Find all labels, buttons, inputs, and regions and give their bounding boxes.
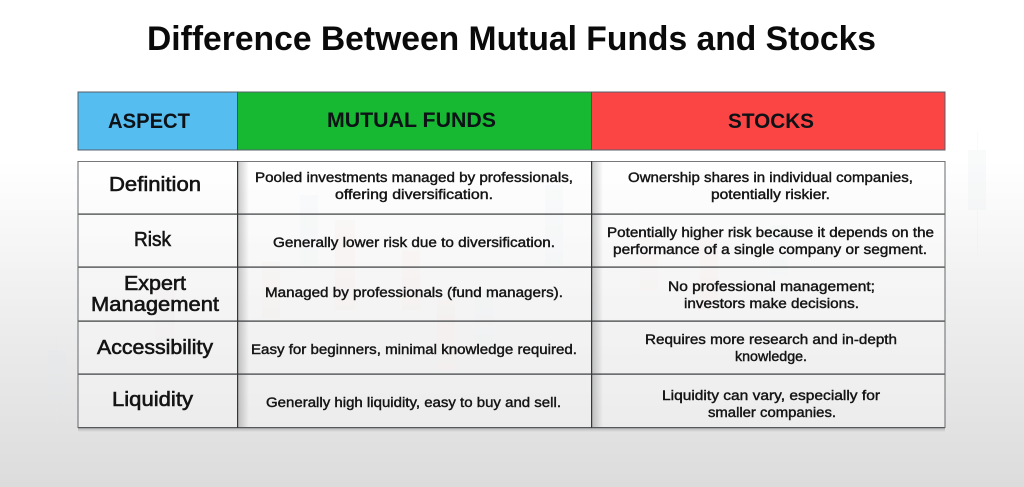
faint candlestick chart backdrop [48,132,986,425]
row: expert management: Expert [124,272,186,295]
row: expert management: Managed by professionals (fund managers). [265,285,563,301]
row: expert management: No professional management; [668,279,875,295]
row: risk: Risk [134,228,172,251]
row: accessibility: knowledge. [735,349,807,365]
row: accessibility [97,332,897,365]
row: expert management [91,272,875,316]
row: accessibility: Easy for beginners, minimal knowledge required. [251,342,577,358]
title: Difference Between Mutual Funds and Stocks [147,20,876,58]
header cell: mutual funds: MUTUAL FUNDS [327,109,496,132]
row: liquidity: Generally high liquidity, easy to buy and sell. [266,395,561,411]
row: definition [109,170,913,203]
table header [78,92,946,150]
row: accessibility: Requires more research and in-depth [645,332,897,348]
row: liquidity: Liquidity can vary, especially for [662,388,880,404]
row: risk: Potentially higher risk because it depends on the [607,225,934,241]
row: expert management: investors make decisions. [684,296,859,312]
row: risk: performance of a single company or segment. [613,242,927,258]
row: definition: potentially riskier. [711,187,830,203]
row: definition: offering diversification. [335,187,493,203]
row: definition: Definition [109,173,201,196]
header cell: stocks: STOCKS [728,110,814,133]
row: liquidity: Liquidity [112,388,194,411]
row: definition: Ownership shares in individual companies, [628,170,913,186]
row: risk: Generally lower risk due to diversification. [273,235,555,251]
header cell: aspect [78,92,238,150]
header cell: aspect: ASPECT [108,110,190,133]
row: liquidity: smaller companies. [708,405,836,421]
header cell: mutual funds [238,92,592,150]
table body [78,161,946,432]
row: risk [134,225,934,258]
header cell: stocks [592,92,946,150]
row: liquidity [112,388,880,421]
row: definition: Pooled investments managed by professionals, [255,170,573,186]
row: accessibility: Accessibility [97,336,214,359]
row: expert management: Management [91,293,219,316]
